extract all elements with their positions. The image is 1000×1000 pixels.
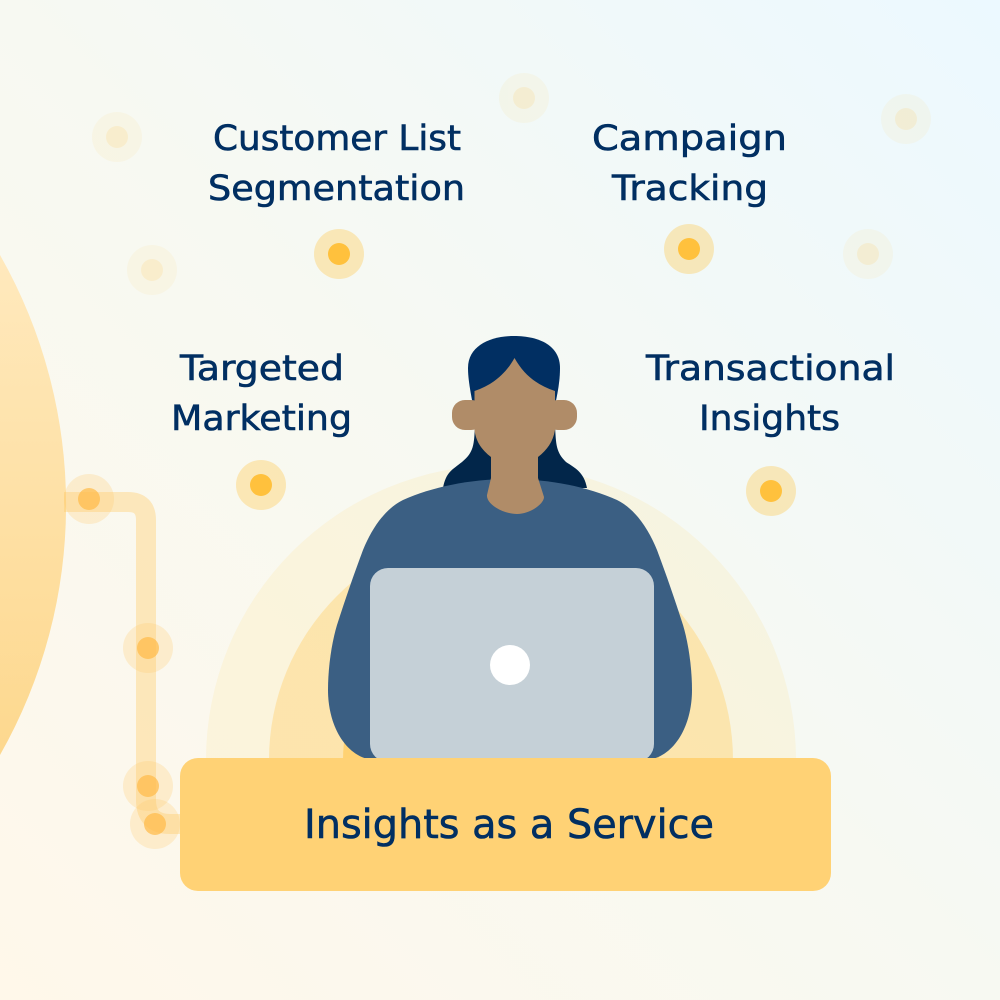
label: Transactional Insights: Insights bbox=[699, 399, 840, 439]
ears bbox=[452, 400, 577, 430]
body bbox=[328, 479, 692, 760]
faded background nodes bbox=[92, 73, 931, 295]
node: transactional insights bbox=[746, 466, 796, 516]
label: Customer List Segmentation: Customer List bbox=[213, 119, 461, 159]
connector nodes bbox=[64, 474, 180, 849]
person bbox=[328, 336, 692, 760]
label: Customer List Segmentation: Segmentation bbox=[208, 169, 465, 209]
concentric arcs bbox=[206, 465, 796, 760]
back hair bbox=[443, 425, 587, 488]
label: Customer List Segmentation bbox=[208, 119, 465, 209]
label: Targeted Marketing: Marketing bbox=[171, 399, 352, 439]
panel: Insights as a Service bbox=[180, 758, 831, 891]
face and neck bbox=[474, 358, 555, 514]
laptop logo bbox=[490, 645, 530, 685]
label: Campaign Tracking bbox=[592, 119, 787, 209]
panel: Insights as a Service: Insights as a Service bbox=[304, 802, 714, 848]
label: Targeted Marketing bbox=[171, 349, 352, 439]
top hair bbox=[468, 336, 560, 405]
label: Campaign Tracking: Tracking bbox=[611, 169, 768, 209]
connector line bbox=[64, 502, 182, 824]
node: targeted marketing bbox=[236, 460, 286, 510]
label: Targeted Marketing: Targeted bbox=[179, 349, 344, 389]
label: Campaign Tracking: Campaign bbox=[592, 119, 787, 159]
node: customer list segmentation bbox=[314, 229, 364, 279]
label: Transactional Insights bbox=[645, 349, 895, 439]
node: campaign tracking bbox=[664, 224, 714, 274]
laptop bbox=[370, 568, 654, 762]
large sun circle bbox=[0, 255, 66, 755]
label: Transactional Insights: Transactional bbox=[645, 349, 895, 389]
